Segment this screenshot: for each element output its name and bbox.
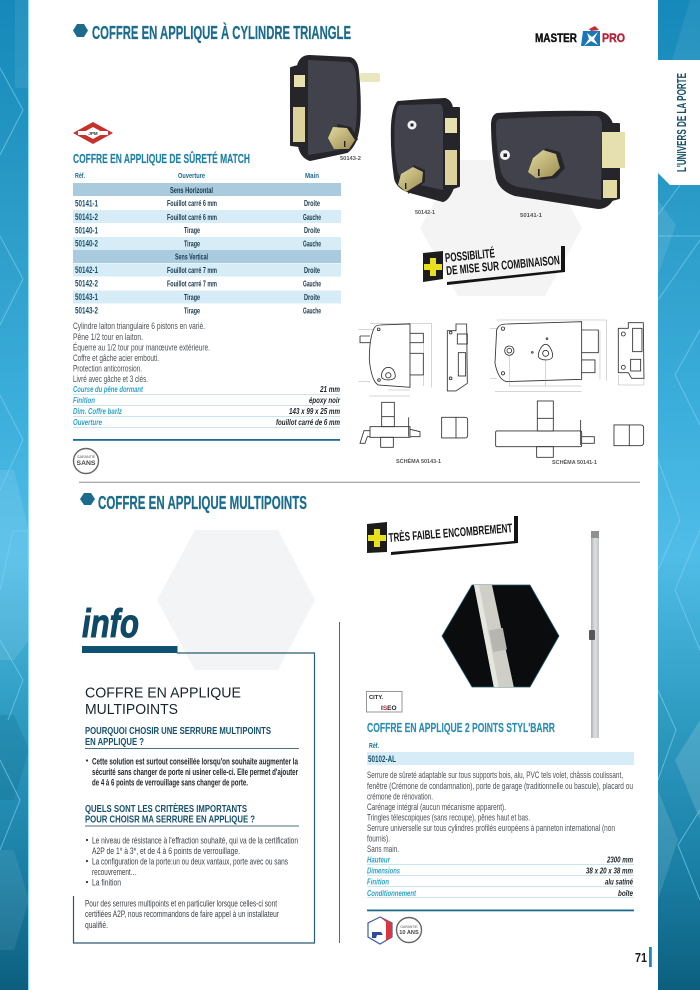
table: references match: Droite <box>304 199 320 208</box>
info answer 1: de 4 à 6 points de verrouillage sans changer de porte. <box>92 776 248 788</box>
caption: schema 50141-1: SCHÉMA 50141-1 <box>552 458 597 466</box>
table: references match: Gauche <box>303 213 321 222</box>
page number <box>635 947 652 967</box>
technical drawing: schema 50143-1 <box>358 323 468 447</box>
right decorative band <box>658 0 700 990</box>
table: references match: Fouillot carré 7 mm <box>167 266 217 275</box>
table: references match: Tirage <box>184 293 200 302</box>
info answer 2: A2P de 1* à 3*, et de 4 à 6 points de verrouillage. <box>92 845 240 856</box>
specs: stylbarr: Dimensions <box>367 866 400 876</box>
specs: stylbarr: boîte <box>618 889 633 898</box>
table: references match: Sens Vertical <box>175 252 208 262</box>
badge: a2p certification <box>368 917 392 944</box>
table: references match: Droite <box>304 293 320 302</box>
info conclusion <box>85 898 279 930</box>
logo: master pro <box>535 26 625 46</box>
table: references match: Main <box>305 171 319 180</box>
side label: l'univers de la porte: L'UNIVERS DE LA PORTE <box>675 73 689 172</box>
table: reference stylbarr: 50102-AL <box>368 754 396 764</box>
specs: match: fouillot carré de 6 mm <box>276 418 340 427</box>
table: references match: Fouillot carré 7 mm <box>167 280 217 288</box>
info answer 2 <box>86 834 298 888</box>
table: references match: Sens Horizontal <box>170 186 213 195</box>
callout: possibilite de mise sur combinaison <box>423 239 565 285</box>
table: references match: 50140-1 <box>75 226 98 236</box>
caption: 50142-1: 50142-1 <box>415 210 435 216</box>
table: references match: Gauche <box>303 280 321 288</box>
specs: match: Ouverture <box>73 418 102 427</box>
subheading: coffre en applique de surete match: COFFRE EN APPLIQUE DE SÛRETÉ MATCH <box>73 151 250 166</box>
badge: garantie sans: GARANTIE <box>77 455 96 459</box>
specs: match: Finition <box>73 396 95 405</box>
table: references match: 50142-2 <box>75 278 98 288</box>
callout: possibilite de mise sur combinaison: POSSIBILITÉ <box>444 245 495 265</box>
specs: stylbarr: alu satiné <box>605 878 633 886</box>
table: references match <box>73 171 341 316</box>
info answer 2: Le niveau de résistance à l'effraction souhaité, qui va de la certification <box>92 834 298 846</box>
logo: jpm <box>73 122 113 144</box>
table: references match: Gauche <box>303 306 321 316</box>
info conclusion: qualifié. <box>85 919 108 930</box>
text block: description stylbarr <box>367 770 633 855</box>
callout: possibilite de mise sur combinaison: DE MISE SUR COMBINAISON <box>446 253 560 278</box>
table: references match: 50143-1 <box>75 292 98 302</box>
table: reference stylbarr <box>367 741 634 765</box>
photo: long bar <box>589 531 599 738</box>
badge: garantie 10 ans: GARANTIE <box>400 925 418 929</box>
panel: info frame <box>74 646 314 943</box>
specs: stylbarr: Finition <box>367 878 389 886</box>
logo: city iseo: ISEO <box>381 705 397 712</box>
table: references match: Gauche <box>303 240 321 248</box>
text block: description stylbarr: Sans main. <box>367 844 399 855</box>
text block: description stylbarr: Tringles télescopiques (sans recoupe), pênes haut et bas. <box>367 812 530 824</box>
caption: schema 50143-1: SCHÉMA 50143-1 <box>396 457 441 465</box>
info question 1 <box>85 726 299 748</box>
specs: match: Dim. Coffre barlz <box>73 407 122 416</box>
info conclusion: certifiées A2P, nous recommandons de faire appel à un installateur <box>85 908 279 919</box>
caption: 50141-1: 50141-1 <box>520 213 542 219</box>
table: references match: 50141-2 <box>75 212 98 222</box>
info answer 1: sécurité sans changer de porte ni usiner celle-ci. Elle permet d'ajouter <box>92 766 298 777</box>
photo: lock 50142-1 <box>392 99 459 201</box>
logo: master pro: MASTER <box>535 33 578 45</box>
table: references match: Fouillot carré 6 mm <box>167 213 217 222</box>
info answer 2: La configuration de la porte:un ou deux vantaux, porte avec ou sans <box>92 856 288 866</box>
subheading: coffre en applique 2 points stylbarr: COFFRE EN APPLIQUE 2 POINTS STYL'BARR <box>367 721 555 735</box>
text block: description match: Protection anticorrosion. <box>73 364 142 374</box>
caption: 50143-2: 50143-2 <box>340 156 361 162</box>
text block: description stylbarr: Carénage intégral (aucun mécanisme apparent). <box>367 802 506 813</box>
info answer 1 <box>86 756 299 788</box>
specs: stylbarr: 38 x 20 x 38 mm <box>586 866 633 876</box>
table: references match: 50141-1 <box>75 198 98 208</box>
table: references match: Droite <box>304 266 320 275</box>
text block: description match <box>73 321 210 385</box>
specs: match: 143 x 99 x 25 mm <box>289 407 340 416</box>
table: references match: Droite <box>304 226 320 235</box>
text block: description match: Livré avec gâche et 3 clés. <box>73 374 148 385</box>
badge: garantie sans <box>74 448 98 474</box>
table: references match: Tirage <box>184 226 200 235</box>
info question 2 <box>85 802 299 826</box>
table: references match: Réf. <box>75 171 85 180</box>
info conclusion: Pour des serrures multipoints et en particulier lorsque celles-ci sont <box>85 898 277 908</box>
heading: info: info <box>82 602 139 646</box>
specs: match: époxy noir <box>309 396 341 405</box>
info question 1: EN APPLIQUE ? <box>85 737 144 748</box>
text block: description stylbarr: crémone de rénovation. <box>367 792 433 802</box>
heading: coffre en applique a cylindre triangle: COFFRE EN APPLIQUE À CYLINDRE TRIANGLE <box>92 22 351 43</box>
specs: match: 21 mm <box>319 385 340 394</box>
table: references match: Ouverture <box>178 171 205 180</box>
badge: garantie sans: SANS <box>77 460 96 467</box>
logo: city iseo <box>366 692 402 712</box>
specs: stylbarr: Conditionnement <box>367 889 416 898</box>
background hexagon: info <box>157 530 315 670</box>
specs: stylbarr: Hauteur <box>367 856 391 864</box>
specs: match <box>73 385 341 428</box>
info answer 2: La finition <box>92 876 121 888</box>
photo: lock 50143-2 <box>291 56 380 160</box>
callout: tres faible encombrement <box>367 516 518 555</box>
page number: 71 <box>635 950 647 965</box>
text block: description stylbarr: fournis). <box>367 834 390 844</box>
logo: jpm: JPM <box>88 131 98 136</box>
specs: match: Course du pêne dormant <box>73 385 143 394</box>
badge: garantie 10 ans: 10 ANS <box>399 930 419 936</box>
info question 2: QUELS SONT LES CRITÈRES IMPORTANTS <box>85 802 247 815</box>
info question 1: POURQUOI CHOSIR UNE SERRURE MULTIPOINTS <box>85 726 271 737</box>
photo: hexagon bar detail <box>442 585 559 688</box>
background hexagon: upper right <box>420 160 582 296</box>
heading: coffre en applique multipoints <box>80 493 307 513</box>
info answer 2: recouvrement… <box>92 866 137 877</box>
table: references match: 50142-1 <box>75 265 98 275</box>
info title: MULTIPOINTS <box>85 701 178 718</box>
technical drawing: schema 50141-1 <box>490 320 644 457</box>
logo: master pro: PRO <box>602 33 625 45</box>
text block: description match: Pêne 1/2 tour en laiton. <box>73 332 143 343</box>
heading: coffre en applique multipoints: COFFRE EN APPLIQUE MULTIPOINTS <box>98 493 307 513</box>
table: references match: Fouillot carré 6 mm <box>167 199 217 208</box>
info question 2: POUR CHOISR MA SERRURE EN APPLIQUE ? <box>85 814 255 826</box>
table: references match: Tirage <box>184 240 200 248</box>
info answer 1: Cette solution est surtout conseillée lorsqu'on souhaite augmenter la <box>92 756 299 766</box>
specs: stylbarr: 2300 mm <box>606 856 633 864</box>
photo: lock 50141-1 <box>492 112 625 208</box>
info title: COFFRE EN APPLIQUE <box>85 684 241 702</box>
table: references match: 50140-2 <box>75 238 98 248</box>
table: references match: Tirage <box>184 306 200 316</box>
table: references match: 50143-2 <box>75 306 98 316</box>
table: reference stylbarr: Réf. <box>369 741 379 750</box>
badge: garantie 10 ans <box>396 918 422 942</box>
text block: description match: Coffre et gâche acier embouti. <box>73 353 159 364</box>
heading: coffre en applique a cylindre triangle <box>73 22 351 43</box>
text block: description match: Équerre au 1/2 tour pour manœuvre extérieure. <box>73 342 210 354</box>
text block: description match: Cylindre laiton triangulaire 6 pistons en varié. <box>73 321 205 332</box>
callout: tres faible encombrement: TRÈS FAIBLE ENCOMBREMENT <box>388 520 513 545</box>
left decorative band <box>0 0 30 990</box>
logo: city iseo: CITY. <box>369 695 384 701</box>
info title <box>85 684 241 718</box>
specs: stylbarr <box>367 856 634 898</box>
